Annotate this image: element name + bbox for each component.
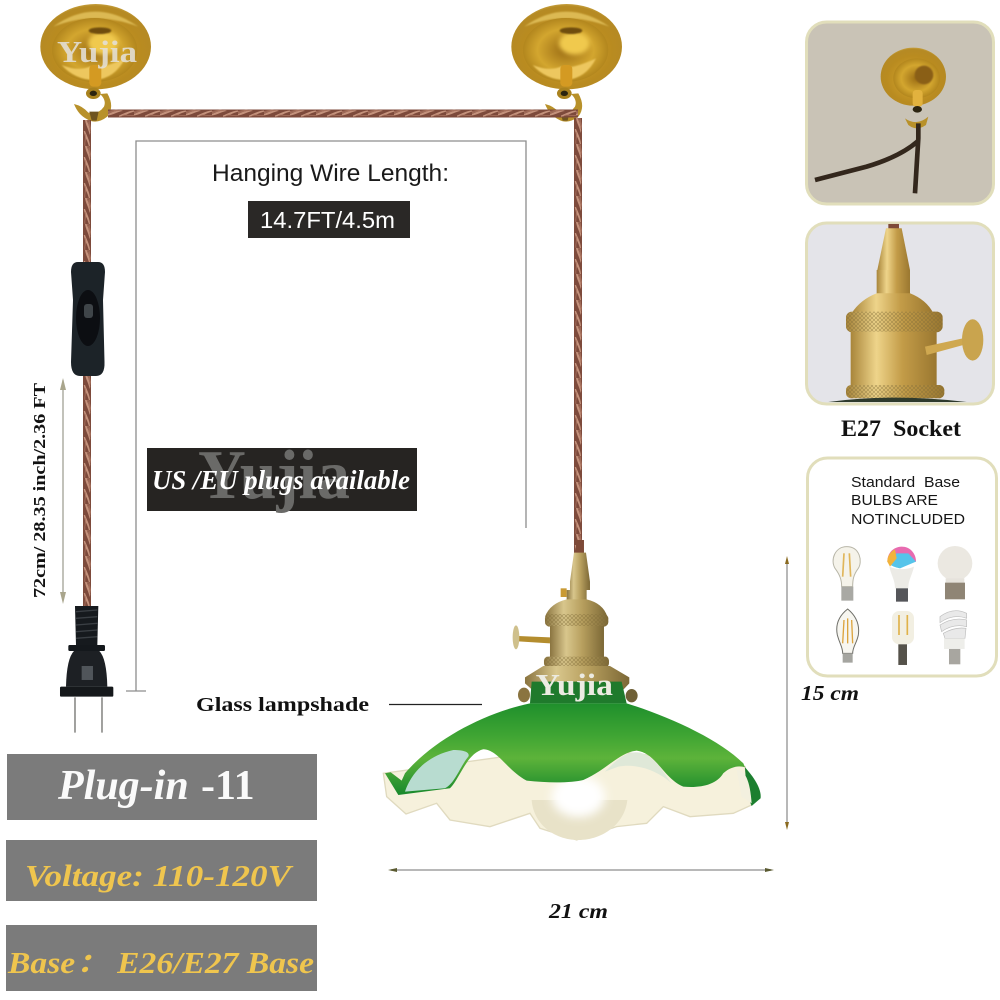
bulb note: NOTINCLUDED (851, 512, 965, 528)
US/EU plug badge: Yujia (198, 437, 350, 514)
height dimension (785, 556, 789, 830)
panel: socket photo (806, 223, 994, 404)
bulb (532, 800, 627, 840)
shade underside (383, 747, 752, 840)
plug (60, 606, 113, 733)
spec bar: base (6, 925, 317, 991)
bulb icons (833, 546, 972, 665)
US/EU plug badge (147, 437, 417, 514)
ceiling rose left with watermark (40, 4, 151, 122)
socket caption: E27 Socket (841, 416, 961, 441)
lamp watermark: Yujia (536, 667, 614, 702)
lamp socket (513, 540, 638, 703)
heading: hanging wire length: Hanging Wire Length: (212, 160, 449, 187)
spec bar: voltage (6, 840, 317, 901)
spec bar: model: Plug-in (57, 763, 189, 809)
label: glass lampshade: Glass lampshade (196, 694, 369, 716)
twisted wire (83, 110, 582, 608)
panel: compatible bulbs (808, 458, 996, 676)
spec bar: model: -11 (201, 763, 255, 809)
hanging wire dimension bracket (126, 141, 526, 691)
length badge (248, 201, 410, 238)
panel: ceiling hook photo (806, 22, 994, 204)
spec bar: voltage: Voltage: 110-120V (25, 858, 294, 893)
width label: 21 cm (548, 899, 608, 923)
72cm arrow (60, 378, 66, 604)
bulb note (851, 475, 965, 528)
pendant lamp (383, 540, 761, 840)
width dimension (388, 868, 774, 872)
length badge: 14.7FT/4.5m (260, 207, 395, 233)
spec bar: base: Base： E26/E27 Base (7, 945, 314, 980)
spec bar: model (7, 754, 317, 820)
bulb note: Standard Base (851, 475, 960, 491)
ceiling rose right (511, 4, 622, 122)
green shade (385, 703, 745, 795)
US/EU plug badge: US /EU plugs available (152, 465, 410, 495)
shade reflection (405, 750, 469, 792)
ceiling rose left with watermark: Yujia (57, 34, 138, 69)
cord length label: 72cm/ 28.35 inch/2.36 FT (30, 382, 49, 598)
bulb note: BULBS ARE (851, 493, 938, 509)
height label: 15 cm (801, 681, 859, 705)
inline switch (71, 262, 105, 376)
